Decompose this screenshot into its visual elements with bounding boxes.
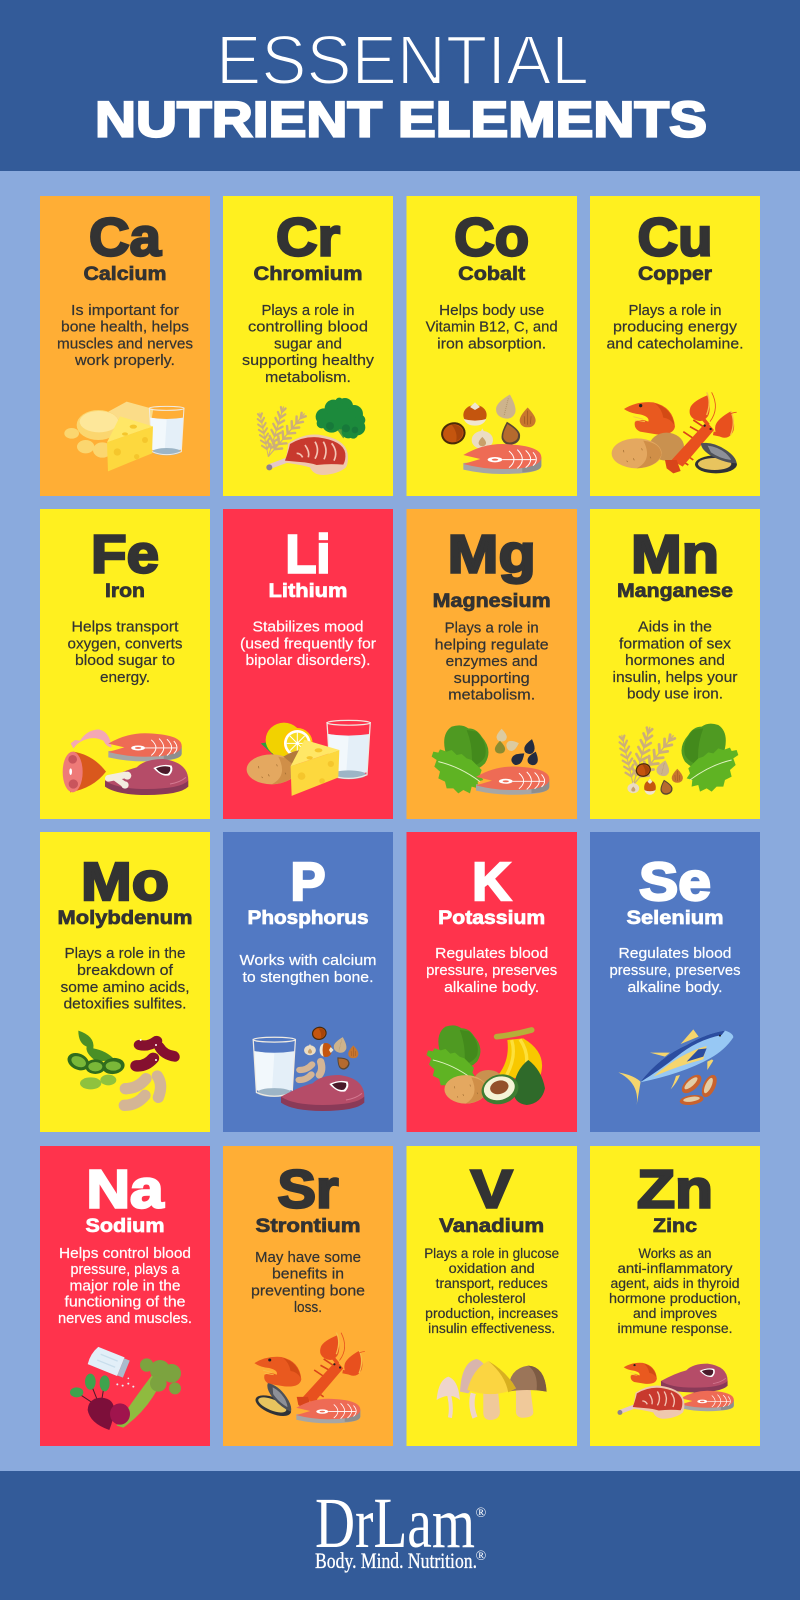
description: Plays a role in — [262, 303, 354, 319]
description: some amino acids, — [60, 980, 190, 996]
symbol: Ca — [89, 208, 162, 268]
panel: phosphorus — [223, 832, 393, 1132]
symbol: V — [471, 1160, 513, 1220]
panel: potassium — [406, 832, 577, 1132]
illustration: mushrooms — [437, 1359, 547, 1420]
name: Sodium — [86, 1216, 164, 1237]
description: nerves and muscles. — [58, 1311, 192, 1327]
illustration: shellfish and salmon — [253, 1331, 368, 1423]
description: blood sugar to — [75, 653, 175, 669]
illustration: soybeans, kidney beans, cashews — [65, 1031, 174, 1105]
description: oxidation and — [449, 1261, 535, 1276]
description: muscles and nerves — [57, 336, 193, 352]
illustration: tuna and brazil nuts — [618, 1029, 733, 1106]
description: bone health, helps — [61, 320, 189, 336]
description: Vitamin B12, C, and — [426, 320, 558, 336]
panel: manganese — [590, 509, 760, 819]
illustration: lemon, potato, cheese, milk — [247, 720, 370, 796]
name: Cobalt — [458, 264, 526, 285]
symbol: Na — [86, 1160, 165, 1220]
description: iron absorption. — [437, 336, 546, 352]
panel: calcium — [40, 196, 210, 496]
panel: iron — [40, 509, 210, 819]
panel: zinc — [590, 1146, 760, 1446]
description: Helps control blood — [59, 1246, 191, 1262]
symbol: Cr — [276, 208, 340, 268]
description: Plays a role in glucose — [424, 1246, 559, 1261]
description: Stabilizes mood — [252, 620, 364, 636]
description: metabolism. — [265, 370, 351, 386]
illustration: wheat, nuts, lettuce — [617, 724, 738, 796]
name: Manganese — [617, 581, 733, 602]
description: oxygen, converts — [68, 636, 182, 652]
description: supporting healthy — [242, 353, 375, 369]
description — [251, 1250, 365, 1316]
symbol: Mn — [631, 526, 719, 584]
symbol: Se — [639, 853, 711, 912]
description: body use iron. — [627, 687, 723, 703]
description: pressure, preserves — [610, 963, 740, 979]
name: Zinc — [653, 1216, 697, 1237]
illustration: salt, beets, celery — [70, 1345, 181, 1430]
description: Works with calcium — [240, 953, 376, 969]
description: transport, reduces — [436, 1276, 548, 1291]
description: pressure, preserves — [426, 963, 557, 979]
description: enzymes and — [446, 654, 538, 670]
description — [240, 953, 376, 986]
description: preventing bone — [251, 1284, 365, 1300]
illustration: shellfish and potatoes — [612, 390, 740, 473]
panel: cobalt — [406, 196, 577, 496]
name: Copper — [638, 264, 713, 285]
description — [612, 620, 738, 703]
description: major role in the — [70, 1278, 180, 1294]
description: Aids in the — [638, 620, 712, 636]
description: production, increases — [425, 1306, 558, 1321]
description: benefits in — [272, 1267, 344, 1283]
description: sugar and — [274, 336, 342, 352]
panel: magnesium — [406, 509, 577, 819]
description: and catecholamine. — [606, 336, 744, 352]
header band with title — [0, 0, 800, 171]
description: alkaline body. — [628, 980, 722, 996]
illustration: milk, nuts, beef — [253, 1025, 364, 1111]
description: Works as an — [638, 1246, 712, 1261]
illustration: shrimp, salmon, ham, beef — [63, 729, 188, 795]
name: Selenium — [626, 908, 724, 929]
illustration: shrimp, beef, steak, salmon — [617, 1363, 734, 1419]
illustration: lettuce, banana, potato, avocado — [426, 1025, 545, 1108]
description — [57, 303, 193, 369]
description — [424, 1246, 559, 1336]
panel: strontium — [223, 1146, 393, 1446]
description: agent, aids in thyroid — [610, 1276, 740, 1291]
description: metabolism. — [448, 688, 535, 704]
panel: copper — [590, 196, 760, 496]
description: energy. — [100, 670, 150, 686]
name: Lithium — [268, 581, 348, 602]
name: Magnesium — [433, 591, 551, 612]
logo wordmark: DrLam — [315, 1483, 475, 1563]
name: Molybdenum — [58, 908, 192, 929]
name: Vanadium — [439, 1216, 544, 1237]
description — [606, 303, 744, 352]
description: producing energy — [613, 320, 738, 336]
name: Strontium — [256, 1216, 360, 1237]
description: Helps body use — [439, 303, 544, 319]
description — [610, 946, 740, 996]
description: functioning of the — [64, 1295, 186, 1311]
description: Regulates blood — [435, 946, 548, 962]
symbol: Sr — [278, 1160, 339, 1220]
description — [426, 946, 557, 996]
description: breakdown of — [77, 963, 174, 979]
footer band with logo — [0, 1471, 800, 1600]
description: cholesterol — [458, 1291, 526, 1306]
symbol: Zn — [637, 1160, 713, 1220]
registered mark top: ® — [476, 1506, 487, 1521]
panel: vanadium — [406, 1146, 577, 1446]
symbol: Mo — [81, 853, 169, 912]
description — [60, 946, 190, 1012]
illustration: wheat, steak, broccoli — [256, 398, 365, 475]
description: Plays a role in — [628, 303, 722, 319]
description: insulin, helps your — [612, 670, 738, 686]
description: Plays a role in — [445, 620, 539, 636]
description: pressure, plays a — [70, 1262, 180, 1278]
description — [68, 620, 182, 686]
description: supporting — [454, 671, 530, 687]
description: (used frequently for — [240, 636, 376, 652]
description — [426, 303, 558, 352]
description — [242, 303, 375, 386]
description: and improves — [633, 1306, 717, 1321]
symbol: Li — [286, 526, 330, 584]
description: anti-inflammatory — [618, 1261, 733, 1276]
panel: selenium — [590, 832, 760, 1132]
description — [609, 1246, 741, 1336]
registered mark bottom: ® — [476, 1549, 487, 1564]
description — [58, 1246, 192, 1327]
description: insulin effectiveness. — [428, 1321, 555, 1336]
description: detoxifies sulfites. — [64, 996, 186, 1012]
title line 1: ESSENTIAL — [216, 21, 589, 99]
description — [435, 620, 549, 704]
description: immune response. — [618, 1321, 732, 1336]
name: Phosphorus — [248, 908, 368, 929]
description: Plays a role in the — [64, 946, 186, 962]
symbol: P — [290, 853, 326, 912]
panel: lithium — [223, 509, 393, 819]
description: hormone production, — [609, 1291, 741, 1306]
symbol: Cu — [638, 208, 712, 268]
description: controlling blood — [248, 320, 368, 336]
symbol: Mg — [448, 526, 536, 584]
description: hormones and — [625, 653, 725, 669]
name: Chromium — [254, 264, 362, 285]
illustration: nuts and salmon — [439, 392, 541, 474]
description: loss. — [294, 1300, 322, 1316]
description: formation of sex — [619, 636, 732, 652]
illustration: dairy — [64, 402, 184, 471]
description: bipolar disorders). — [246, 653, 370, 669]
panel: molybdenum — [40, 832, 210, 1132]
description: Helps transport — [72, 620, 178, 636]
panel: chromium — [223, 196, 393, 496]
name: Calcium — [84, 264, 166, 285]
description: Regulates blood — [618, 946, 732, 962]
illustration: lettuce, seeds, salmon — [432, 725, 549, 795]
description: helping regulate — [435, 637, 549, 653]
symbol: Co — [454, 208, 529, 268]
description: to stengthen bone. — [242, 970, 374, 986]
symbol: K — [472, 853, 512, 912]
description: May have some — [255, 1250, 361, 1266]
title line 2: NUTRIENT ELEMENTS — [95, 92, 707, 148]
description: Is important for — [71, 303, 179, 319]
description — [240, 620, 376, 669]
name: Iron — [105, 581, 145, 602]
symbol: Fe — [91, 526, 159, 584]
description: alkaline body. — [444, 980, 539, 996]
name: Potassium — [438, 908, 545, 929]
description: work properly. — [74, 353, 175, 369]
panel: sodium — [40, 1146, 210, 1446]
logo tagline: Body. Mind. Nutrition. — [315, 1548, 477, 1573]
